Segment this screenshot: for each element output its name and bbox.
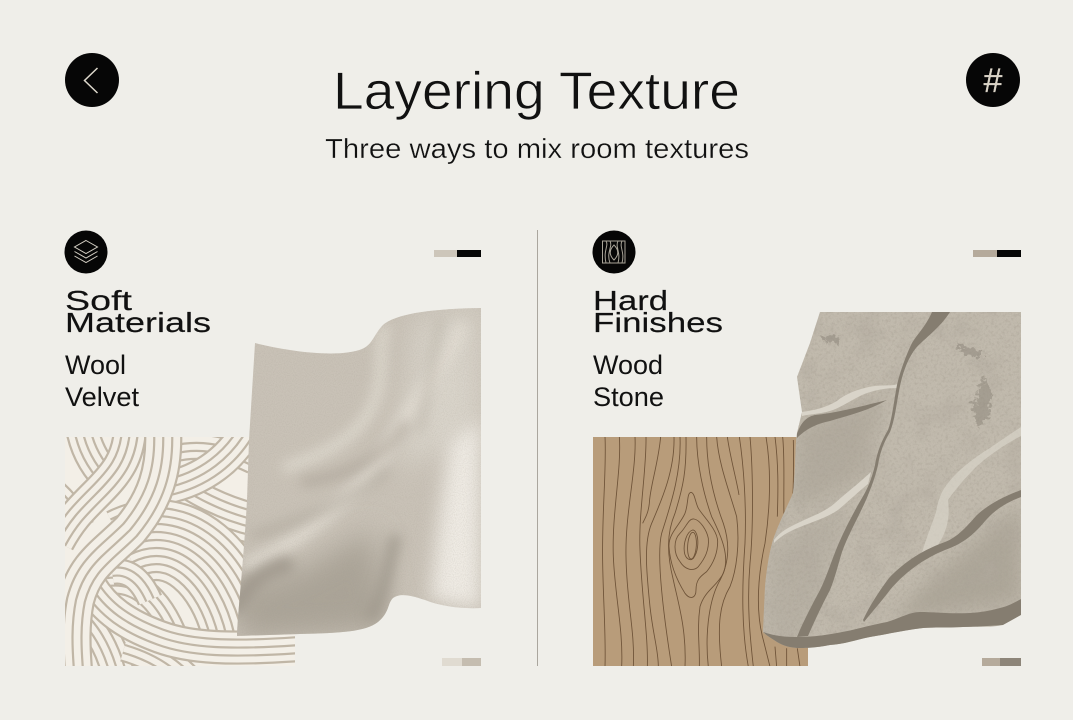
heading: soft materials xyxy=(65,285,211,338)
heading: hard finishes: Hard xyxy=(593,285,668,316)
swatch bar bottom xyxy=(982,658,1021,666)
stone texture swatch xyxy=(760,310,1022,650)
swatch bar top xyxy=(434,250,481,257)
wood texture swatch xyxy=(593,437,808,667)
centre divider xyxy=(537,230,538,666)
title: Layering Texture xyxy=(333,62,740,121)
swatch bar bottom xyxy=(442,658,481,666)
heading: hard finishes: Finishes xyxy=(593,307,723,338)
back button icon xyxy=(65,53,119,107)
wool texture swatch xyxy=(65,437,295,666)
icon: layers xyxy=(64,230,108,274)
hash button icon: # xyxy=(984,62,1003,100)
list: wool, velvet: Velvet xyxy=(65,382,139,412)
hash button icon xyxy=(966,53,1020,107)
stone dark cracks xyxy=(763,312,1021,648)
list: wool, velvet xyxy=(65,350,139,412)
heading: hard finishes xyxy=(593,285,723,338)
heading: soft materials: Soft xyxy=(65,285,132,316)
velvet texture swatch xyxy=(230,300,485,640)
heading: soft materials: Materials xyxy=(65,307,211,338)
icon: wood grain xyxy=(592,230,636,274)
stone light veins xyxy=(774,384,1021,560)
list: wood, stone: Wood xyxy=(593,350,663,380)
list: wood, stone: Stone xyxy=(593,382,664,412)
subtitle: Three ways to mix room textures xyxy=(325,133,749,164)
panel: hard finishes xyxy=(592,230,1022,667)
list: wood, stone xyxy=(593,350,664,412)
list: wool, velvet: Wool xyxy=(65,350,126,380)
panel: soft materials xyxy=(55,230,485,688)
swatch bar top xyxy=(973,250,1021,257)
